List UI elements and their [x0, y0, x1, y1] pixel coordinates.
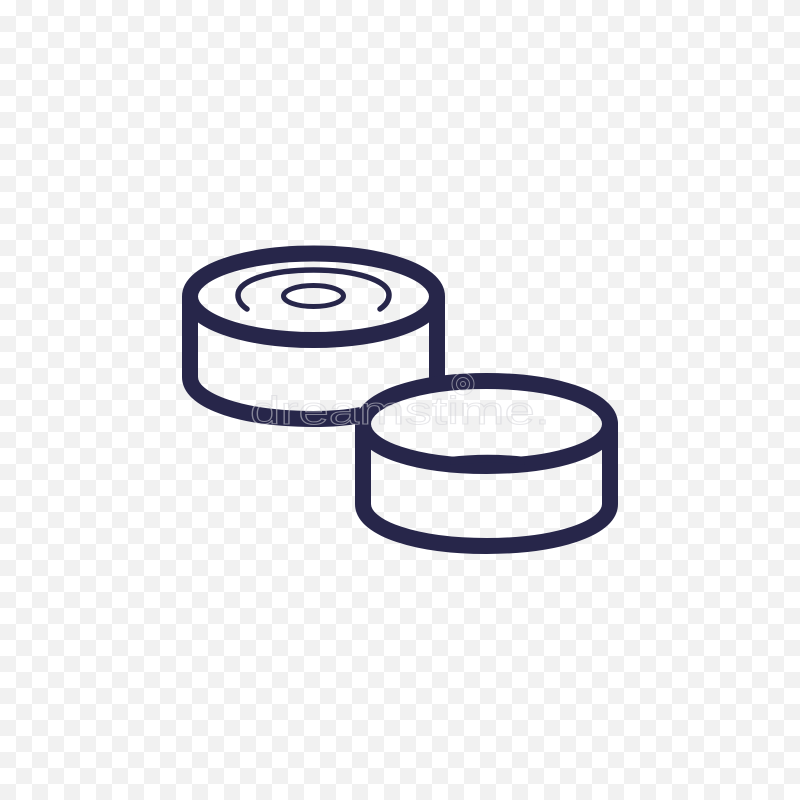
icon: right puck: [363, 381, 610, 546]
right puck top rim: [363, 381, 610, 466]
left puck outer ring arc: [238, 270, 389, 309]
watermark logo: [452, 373, 474, 395]
right puck sides and base: [363, 424, 610, 546]
right puck centre rim thickening: [450, 459, 525, 461]
icon: left puck with rings: [190, 254, 437, 419]
left puck top rim: [190, 254, 437, 340]
left puck centre ring: [284, 286, 344, 306]
watermark: [250, 373, 550, 433]
left puck sides and base: [190, 296, 437, 419]
watermark text: dreamstime.: [250, 390, 550, 433]
